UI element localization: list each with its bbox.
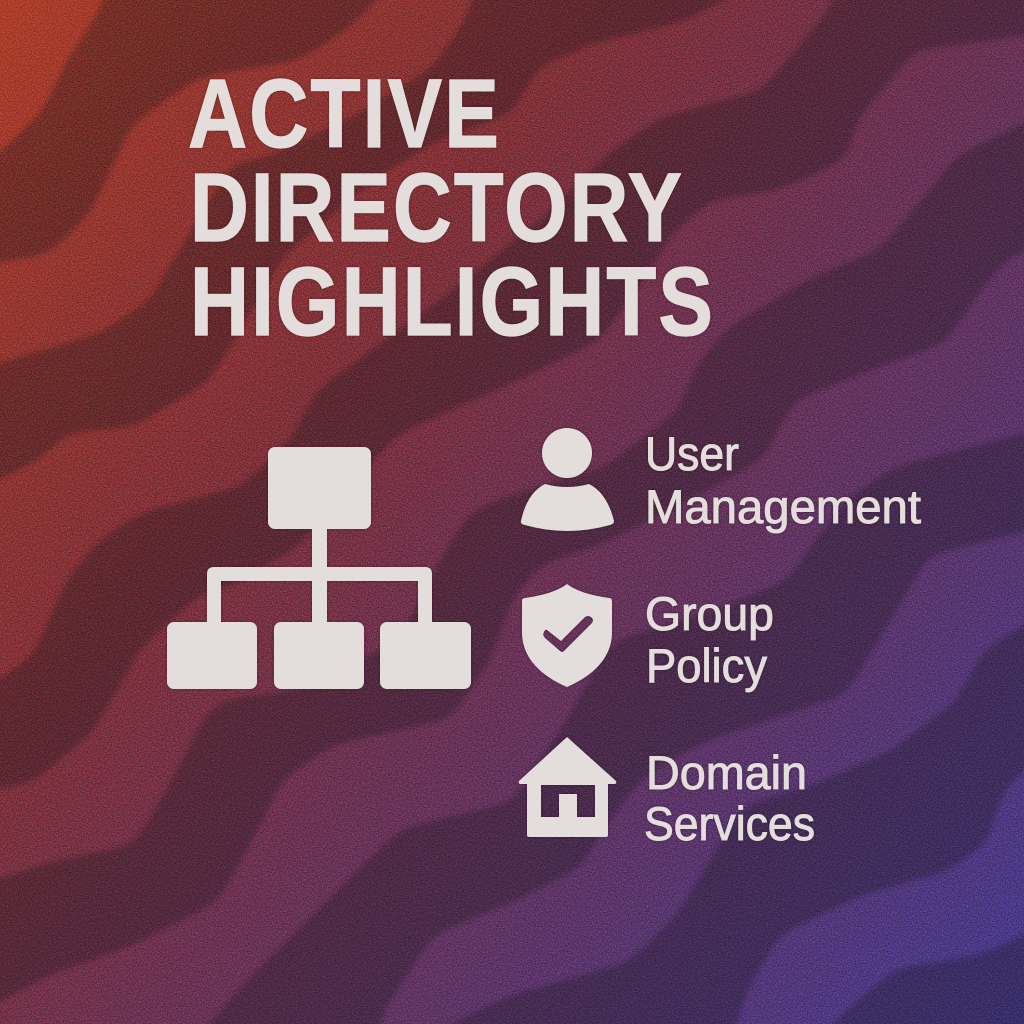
label: domain services: Domain [646, 746, 807, 799]
label: domain services: Services [644, 797, 815, 850]
icon: house [519, 737, 616, 837]
title: DIRECTORY [190, 153, 684, 262]
label: user management: Management [645, 480, 921, 533]
label: user management: User [645, 427, 739, 480]
title: ACTIVE [188, 59, 501, 168]
label: group policy: Group [645, 587, 774, 640]
label: user management [645, 427, 921, 533]
icon: user [521, 428, 614, 531]
icon: shield with check [522, 584, 612, 687]
item: group policy [522, 584, 774, 692]
label: group policy [645, 587, 774, 692]
title [188, 59, 715, 356]
title: HIGHLIGHTS [190, 247, 715, 356]
label: domain services [644, 746, 815, 850]
icon: organisation hierarchy chart [167, 447, 471, 689]
item: domain services [519, 737, 815, 850]
item: user management [521, 427, 921, 533]
label: group policy: Policy [646, 639, 767, 692]
